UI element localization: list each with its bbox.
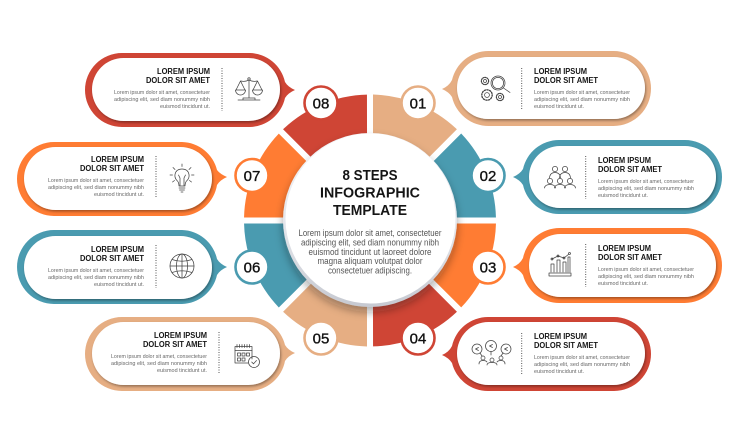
central description: Lorem ipsum dolor sit amet, consectetuer — [298, 228, 442, 238]
text block 02: Lorem ipsum dolor sit amet, consectetuer — [598, 179, 694, 185]
segment 05 — [283, 279, 367, 346]
text block 02: DOLOR SIT AMET — [598, 164, 663, 174]
number badge 03: 03 — [480, 260, 496, 276]
panel: step 04 — [442, 317, 651, 391]
number badge 07 — [236, 159, 268, 192]
panel: step 03 — [513, 228, 722, 303]
segment 08 — [283, 70, 390, 177]
chart: ring of eight segments — [219, 70, 521, 371]
title: 8 STEPS — [342, 167, 398, 184]
text block 06: adipiscing elit, sed diam nonummy nibh — [48, 275, 144, 281]
segment 06 — [219, 200, 326, 307]
text block 01: LOREM IPSUM — [534, 66, 587, 76]
panel: step 07 — [17, 142, 227, 216]
panel: step 02 — [513, 140, 722, 214]
text block 06: LOREM IPSUM — [91, 244, 144, 254]
panel: step 05 — [85, 317, 295, 391]
text block 04 — [534, 331, 630, 375]
text block 03: Lorem ipsum dolor sit amet, consectetuer — [598, 267, 694, 273]
text block 08 — [114, 66, 211, 110]
text block 02: adipiscing elit, sed diam nonummy nibh — [598, 186, 694, 192]
text block 04: adipiscing elit, sed diam nonummy nibh — [534, 362, 630, 368]
text block 01: DOLOR SIT AMET — [534, 75, 599, 85]
panel: step 06 — [17, 230, 227, 304]
text block 05: adipiscing elit, sed diam nonummy nibh — [111, 361, 207, 367]
text block 04: euismod tincidunt ut. — [534, 369, 584, 375]
text block 07 — [48, 154, 145, 198]
segment 03 — [429, 224, 496, 307]
segment 02 — [414, 134, 521, 241]
text block 06: DOLOR SIT AMET — [80, 253, 145, 263]
panel: step 01 — [442, 51, 651, 126]
central description: adipiscing elit, sed diam nonummy nibh — [301, 238, 439, 248]
text block 02: LOREM IPSUM — [598, 155, 651, 165]
central description — [298, 228, 442, 276]
text block 06: euismod tincidunt ut. — [94, 282, 144, 288]
text block 05: Lorem ipsum dolor sit amet, consectetuer — [111, 354, 207, 360]
number badge 06: 06 — [244, 260, 260, 276]
text block 07: LOREM IPSUM — [91, 154, 144, 164]
text block 02 — [598, 155, 694, 199]
number badge 07: 07 — [244, 168, 260, 185]
text block 01: euismod tincidunt ut. — [534, 104, 584, 110]
text block 03: euismod tincidunt ut. — [598, 281, 648, 287]
text block 07: Lorem ipsum dolor sit amet, consectetuer — [48, 178, 144, 184]
title: TEMPLATE — [333, 202, 407, 219]
number badge 02 — [472, 159, 504, 192]
text block 04: Lorem ipsum dolor sit amet, consectetuer — [534, 355, 630, 361]
text block 01 — [534, 66, 630, 110]
text block 04: LOREM IPSUM — [534, 331, 587, 341]
number badge 01: 01 — [410, 96, 426, 112]
icon: calendar — [235, 344, 260, 368]
text block 06: Lorem ipsum dolor sit amet, consectetuer — [48, 268, 144, 274]
icon: light bulb — [170, 164, 194, 192]
title — [320, 167, 420, 219]
title: INFOGRAPHIC — [320, 184, 420, 202]
panel: step 08 — [85, 53, 295, 127]
central description: magna aliquam volutpat dolor — [318, 256, 422, 266]
segment 04 — [350, 264, 457, 371]
number badge 06 — [236, 250, 268, 284]
segment 01 — [373, 95, 457, 162]
number badge 04 — [402, 322, 434, 354]
text block 05: DOLOR SIT AMET — [143, 339, 208, 349]
number badge 05: 05 — [313, 330, 329, 348]
icon: balance scales — [236, 78, 262, 100]
icon: team — [544, 166, 576, 188]
central description: consectetuer adipiscing. — [328, 266, 412, 276]
text block 03: adipiscing elit, sed diam nonummy nibh — [598, 274, 694, 280]
text block 08: Lorem ipsum dolor sit amet, consectetuer — [114, 90, 210, 96]
icon: bar chart — [549, 252, 571, 276]
icon: sharing people — [472, 340, 511, 365]
icon: gears and magnifier — [481, 76, 510, 101]
number badge 03 — [472, 250, 504, 284]
number badge 01 — [402, 86, 434, 120]
text block 08: LOREM IPSUM — [157, 66, 210, 76]
number badge 08: 08 — [313, 96, 329, 112]
central circle — [283, 133, 457, 307]
text block 01: Lorem ipsum dolor sit amet, consectetuer — [534, 90, 630, 96]
icon: globe — [170, 254, 194, 278]
central description: euismod tincidunt ut laoreet dolore — [308, 247, 432, 257]
number badge 02: 02 — [480, 168, 496, 185]
text block 05: LOREM IPSUM — [154, 330, 207, 340]
number badge 05 — [304, 322, 338, 354]
number badge 08 — [304, 86, 338, 120]
text block 03 — [598, 243, 694, 287]
text block 03: DOLOR SIT AMET — [598, 252, 663, 262]
text block 06 — [48, 244, 145, 288]
text block 08: adipiscing elit, sed diam nonummy nibh — [114, 97, 210, 103]
number badge 04: 04 — [410, 330, 426, 348]
text block 04: DOLOR SIT AMET — [534, 340, 599, 350]
text block 07: euismod tincidunt ut. — [94, 192, 144, 198]
text block 05: euismod tincidunt ut. — [157, 368, 207, 374]
text block 07: adipiscing elit, sed diam nonummy nibh — [48, 185, 144, 191]
text block 08: DOLOR SIT AMET — [146, 75, 211, 85]
text block 07: DOLOR SIT AMET — [80, 163, 145, 173]
text block 03: LOREM IPSUM — [598, 243, 651, 253]
text block 02: euismod tincidunt ut. — [598, 193, 648, 199]
text block 05 — [111, 330, 208, 374]
text block 08: euismod tincidunt ut. — [160, 104, 210, 110]
segment 07 — [244, 134, 311, 218]
text block 01: adipiscing elit, sed diam nonummy nibh — [534, 97, 630, 103]
